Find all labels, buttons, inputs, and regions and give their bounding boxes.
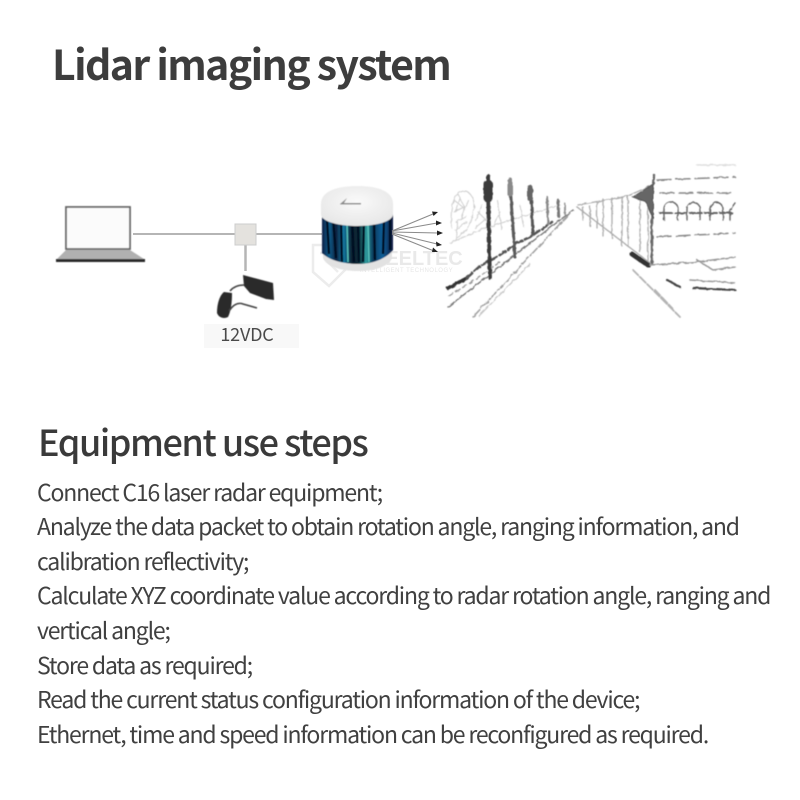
step 3 continued: vertical angle; [37, 612, 170, 646]
step 4: Store data as required; [37, 647, 252, 681]
cable: laptop to lidar [133, 233, 322, 235]
step 1: Connect C16 laser radar equipment; [37, 474, 382, 508]
cable: junction to power adapter [244, 244, 247, 271]
watermark: INTELLIGENT TECHNOLOGY [360, 268, 453, 274]
step 2 continued: calibration reflectivity; [37, 543, 248, 577]
watermark: WHEELTEC [352, 248, 463, 270]
watermark [313, 245, 463, 286]
title: Lidar imaging system [52, 32, 450, 92]
sketch: left trees [450, 191, 560, 243]
label: 12VDC [204, 321, 299, 348]
sketch: curb and road lines [448, 210, 573, 307]
icon: power adapter [217, 275, 274, 318]
heading: equipment use steps: Equipment use steps [38, 415, 367, 467]
sketch: lamp posts [488, 176, 565, 278]
icon: laptop [56, 207, 145, 262]
sketch: building [652, 175, 654, 264]
step 6: Ethernet, time and speed information can be reconfigured as required. [37, 716, 708, 750]
sketch: right foreground [650, 257, 735, 283]
arrows: laser beams [392, 212, 443, 252]
icon: lidar sensor [321, 186, 393, 271]
icon: junction box [235, 224, 256, 245]
step 2: Analyze the data packet to obtain rotation angle, ranging information, and [37, 508, 739, 542]
steps text block [37, 474, 770, 750]
step 5: Read the current status configuration information of the device; [37, 681, 639, 715]
system diagram [55, 164, 738, 347]
label: 12VDC: 12VDC [220, 321, 274, 347]
sketch: right colonnade [577, 186, 650, 263]
sketch: street scene [448, 165, 735, 317]
step 3: Calculate XYZ coordinate value according to radar rotation angle, ranging and [37, 577, 770, 611]
